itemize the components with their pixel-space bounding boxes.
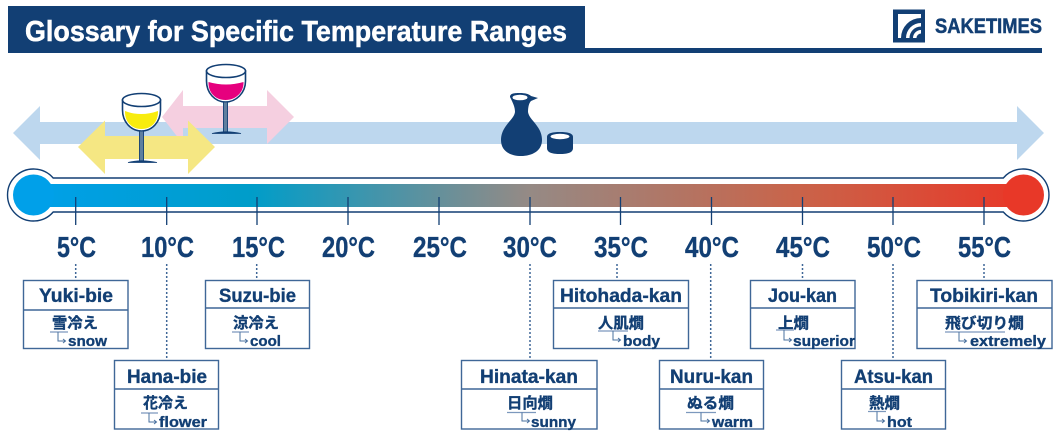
temperature labels: 5°C	[57, 232, 96, 264]
panel: Jou-kan	[750, 280, 855, 350]
arrow: red wine temperature range (pink)	[162, 90, 294, 144]
arrow: white wine temperature range (yellow)	[78, 120, 215, 174]
temperature labels	[57, 232, 1011, 264]
logo: SAKETIMES: SAKETIMES	[935, 15, 1042, 38]
temperature labels: 15°C	[232, 232, 285, 264]
panel: Nuru-kan: ぬる燗	[687, 395, 734, 412]
temperature labels: 30°C	[503, 232, 557, 264]
panel: Hinata-kan: 日向燗	[507, 395, 553, 412]
panel: Atsu-kan: Atsu-kan	[854, 367, 933, 388]
panel: Nuru-kan: warm	[711, 414, 753, 431]
panel: Hinata-kan: Hinata-kan	[480, 367, 578, 388]
temperature labels: 20°C	[322, 232, 375, 264]
temperature labels: 35°C	[594, 232, 648, 264]
title: Glossary for Specific Temperature Ranges	[25, 16, 567, 48]
panel: Yuki-bie: Yuki-bie	[39, 286, 113, 307]
panel: Atsu-kan: 熱燗	[869, 394, 900, 412]
panel: Hana-bie: flower	[159, 414, 207, 431]
panel: Jou-kan: Jou-kan	[768, 286, 837, 307]
thermometer	[8, 169, 1049, 225]
temperature labels: 50°C	[867, 232, 921, 264]
panel: Hitohada-kan: 人肌燗	[598, 315, 644, 332]
panel: Hinata-kan: sunny	[531, 414, 577, 431]
icon: white wine glass	[122, 94, 160, 162]
panel: Nuru-kan: Nuru-kan	[670, 367, 753, 388]
panel: Yuki-bie	[24, 280, 128, 350]
temperature labels: 25°C	[413, 232, 467, 264]
icon: sake flask and cup	[501, 93, 573, 156]
panel: Hinata-kan	[462, 360, 597, 431]
title bar	[8, 6, 1042, 53]
panel: Atsu-kan: hot	[887, 414, 912, 431]
temperature labels: 10°C	[141, 232, 194, 264]
panel: Hana-bie: Hana-bie	[127, 367, 207, 388]
panel: Suzu-bie	[206, 280, 310, 350]
panel: Suzu-bie: 涼冷え	[233, 315, 279, 332]
temperature labels: 55°C	[958, 232, 1011, 264]
panel: Hitohada-kan	[554, 280, 688, 350]
panel: Tobikiri-kan: extremely	[970, 333, 1047, 350]
panel: Jou-kan: 上燗	[778, 315, 809, 332]
arrow: sake temperature range (blue)	[13, 106, 1044, 160]
panel: Tobikiri-kan	[917, 280, 1052, 350]
panel: Hitohada-kan: Hitohada-kan	[560, 286, 682, 307]
temperature labels: 40°C	[685, 232, 739, 264]
panel: Tobikiri-kan: Tobikiri-kan	[930, 286, 1038, 307]
icon: red wine glass	[206, 64, 246, 134]
panel: Hitohada-kan: body	[623, 333, 661, 350]
panel: Suzu-bie: Suzu-bie	[219, 286, 296, 307]
panel: Yuki-bie: 雪冷え	[52, 315, 98, 332]
temperature labels: 45°C	[776, 232, 830, 264]
panel: Nuru-kan	[660, 360, 764, 431]
panel: Atsu-kan	[842, 360, 946, 431]
panel: Suzu-bie: cool	[250, 333, 281, 350]
panel: Jou-kan: superior	[793, 333, 855, 350]
scale ticks	[76, 197, 984, 225]
panel: Hana-bie	[114, 360, 218, 431]
panel: Tobikiri-kan: 飛び切り燗	[945, 315, 1024, 332]
panel: Yuki-bie: snow	[68, 333, 107, 350]
logo: SAKETIMES	[893, 10, 1042, 42]
dotted leader lines	[76, 264, 984, 360]
panel: Hana-bie: 花冷え	[143, 394, 188, 412]
